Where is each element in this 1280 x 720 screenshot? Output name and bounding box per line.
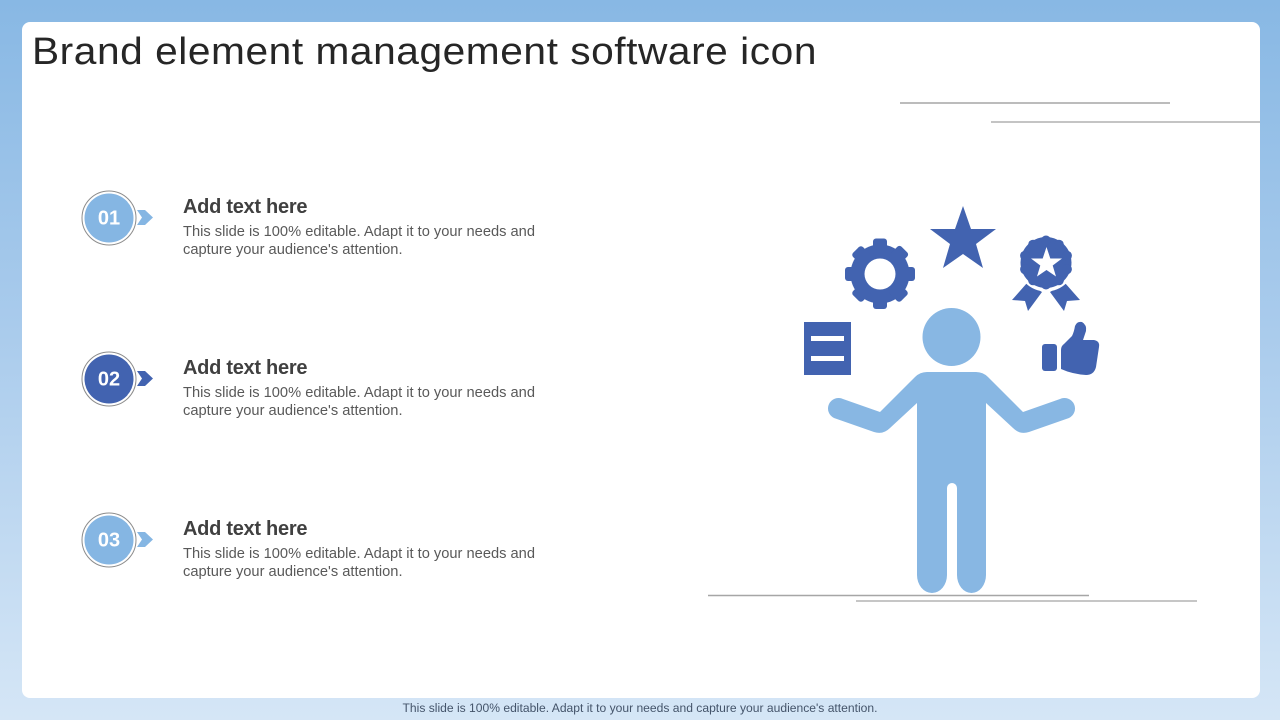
body text 1: capture your audience's attention. — [183, 242, 403, 258]
icon: star — [930, 206, 996, 268]
body text 2: This slide is 100% editable. Adapt it to your needs and — [183, 385, 535, 401]
body text 2 — [183, 385, 535, 419]
body text 3 — [183, 546, 535, 580]
body text 3: This slide is 100% editable. Adapt it to your needs and — [183, 546, 535, 562]
heading 3: Add text here — [183, 518, 307, 540]
icon: person — [828, 308, 1075, 593]
ground lines — [708, 596, 1197, 601]
badge 01 — [82, 190, 153, 246]
footer note: This slide is 100% editable. Adapt it to your needs and capture your audience's attention. — [403, 701, 877, 715]
body text 2: capture your audience's attention. — [183, 403, 403, 419]
icon: document — [804, 322, 851, 375]
badge 03: 03 — [98, 530, 120, 552]
body text 1 — [183, 224, 535, 258]
body text 1: This slide is 100% editable. Adapt it to your needs and — [183, 224, 535, 240]
body text 3: capture your audience's attention. — [183, 564, 403, 580]
item 1 — [82, 190, 535, 258]
badge 01: 01 — [98, 208, 120, 230]
item 2 — [82, 352, 535, 419]
icon: gear — [845, 238, 915, 309]
item 3 — [82, 512, 535, 580]
icon: thumbs up — [1042, 322, 1099, 375]
heading 1: Add text here — [183, 196, 307, 218]
badge 02 — [82, 352, 153, 406]
title: Brand element management software icon — [32, 31, 817, 73]
heading 2: Add text here — [183, 357, 307, 379]
badge 03 — [82, 512, 153, 568]
badge 02: 02 — [98, 368, 120, 390]
top decorative rule lines — [900, 102, 1260, 123]
icon: award ribbon — [1012, 234, 1080, 311]
